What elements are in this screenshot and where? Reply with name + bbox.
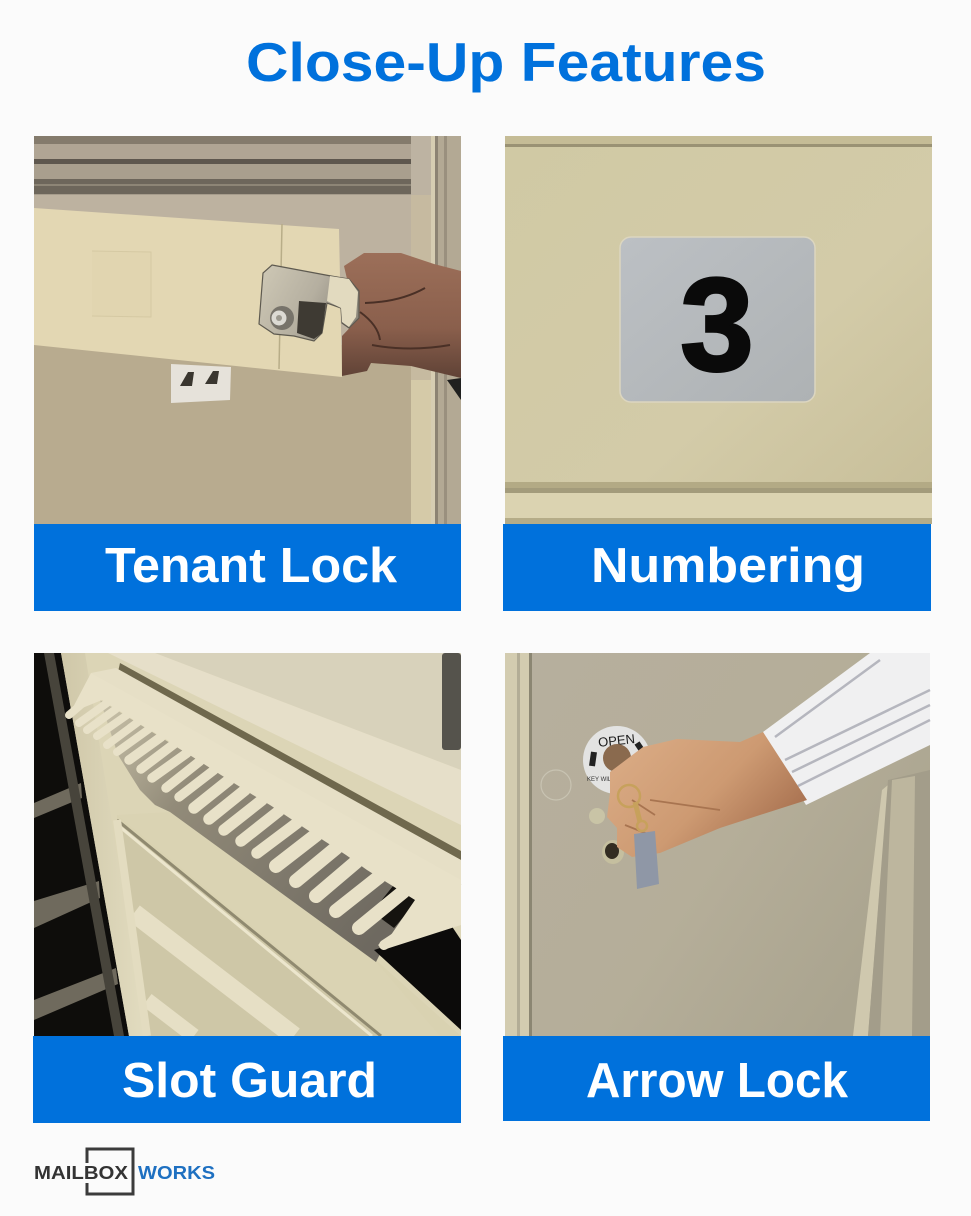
panel: tenant lock xyxy=(34,136,461,611)
photo: number plate xyxy=(505,136,932,524)
logo: Mailbox Works: WORKS xyxy=(138,1163,215,1183)
number 3: 3 xyxy=(680,251,754,398)
rail and lower bars xyxy=(117,820,381,1036)
comb band xyxy=(70,673,461,948)
number plate xyxy=(620,237,815,402)
title: Close-Up Features xyxy=(246,31,766,93)
icon: open sticker xyxy=(583,726,651,794)
door panel xyxy=(34,208,342,377)
label bar: Tenant Lock: Tenant Lock xyxy=(105,539,398,593)
icon: shirt sleeve xyxy=(763,653,930,805)
label bar: Numbering: Numbering xyxy=(591,539,865,593)
groove xyxy=(118,663,461,860)
photo: tenant lock on open door xyxy=(34,136,461,524)
label bar: Numbering xyxy=(503,524,931,611)
icon: hand xyxy=(607,732,807,857)
icon: open sticker: KEY WILL xyxy=(587,777,615,783)
label bar: Arrow Lock: Arrow Lock xyxy=(586,1054,849,1108)
underside of guard xyxy=(100,700,434,962)
panel: arrow lock xyxy=(503,653,930,1121)
icon: metal latch xyxy=(259,265,359,341)
photo: key in arrow lock xyxy=(505,653,930,1036)
label bar: Arrow Lock xyxy=(503,1036,930,1121)
socket plate xyxy=(171,364,231,403)
comb teeth xyxy=(69,691,440,945)
label bar: Slot Guard xyxy=(33,1036,461,1123)
rail above comb xyxy=(91,668,461,890)
upper box xyxy=(155,653,461,770)
shelves xyxy=(34,783,82,818)
icon: key ring and tag xyxy=(618,785,659,889)
panel: numbering xyxy=(503,136,932,611)
black gap under comb xyxy=(374,925,461,1030)
photo: slot guard comb xyxy=(34,653,461,1036)
panel: slot guard xyxy=(33,653,461,1123)
lower cabinet face xyxy=(117,815,461,1036)
logo: Mailbox Works: MAILBOX xyxy=(34,1163,128,1183)
label bar: Tenant Lock xyxy=(34,524,461,611)
logo: Mailbox Works xyxy=(34,1149,215,1194)
frame post and cabinet xyxy=(61,653,461,1036)
icon: hand xyxy=(342,253,461,378)
buttons below lock xyxy=(589,808,605,824)
label bar: Slot Guard: Slot Guard xyxy=(122,1054,377,1108)
icon: open sticker: OPEN xyxy=(597,731,636,750)
